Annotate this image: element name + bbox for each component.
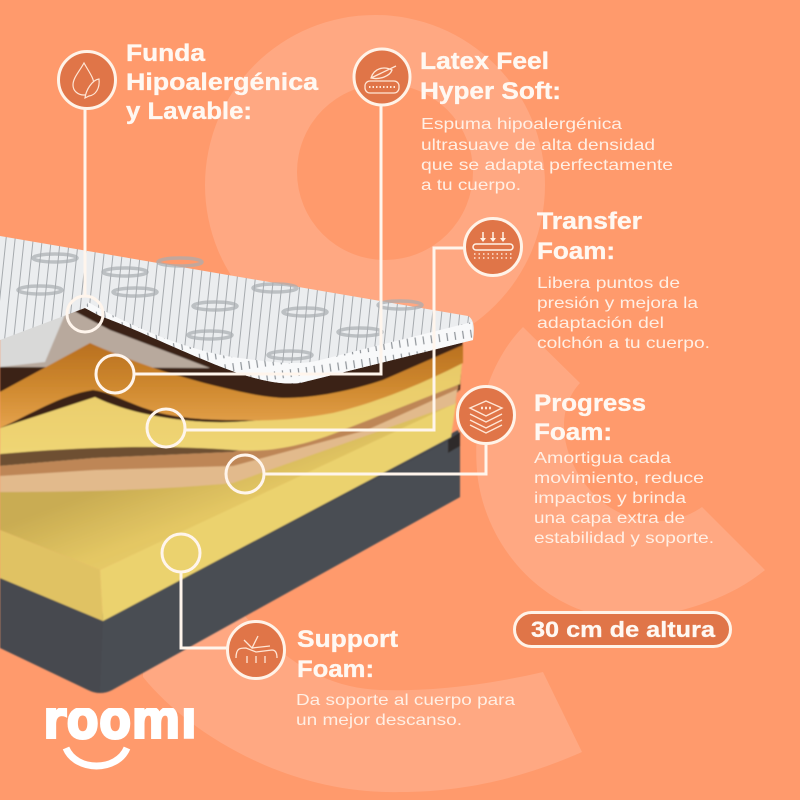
text: transfer foam (537, 208, 710, 352)
text: latex feel: Hyper Soft: (420, 78, 561, 105)
connector: progress foam (226, 444, 486, 493)
text: progress foam: movimiento, reduce (534, 470, 704, 487)
text: transfer foam: Libera puntos de (537, 275, 680, 292)
connector: funda (67, 108, 103, 332)
brown shadow band (0, 378, 460, 472)
text: progress foam: impactos y brinda (534, 490, 686, 507)
text: support foam: Da soporte al cuerpo para (296, 692, 515, 709)
text: transfer foam: presión y mejora la (537, 295, 698, 312)
mattress (0, 236, 474, 693)
transfer foam layer (0, 363, 462, 454)
latex layer (0, 343, 463, 428)
text: latex feel: que se adapta perfectamente (421, 157, 673, 174)
text: progress foam: Progress (534, 390, 646, 417)
icon: latex pillow and feather (354, 49, 410, 105)
text: transfer foam: adaptación del (537, 315, 664, 332)
text: funda hipoalergénica: Funda (126, 40, 206, 67)
gray base layer (0, 430, 460, 693)
dark backing between layers (0, 305, 463, 472)
text: support foam: un mejor descanso. (296, 712, 462, 729)
text: latex feel: ultrasuave de alta densidad (421, 137, 655, 154)
cover underside (0, 310, 210, 368)
text: transfer foam: Transfer (537, 208, 642, 235)
text: support foam (296, 626, 515, 729)
text: latex feel (420, 48, 673, 194)
text: progress foam: Amortigua cada (534, 450, 671, 467)
text: latex feel: a tu cuerpo. (421, 177, 521, 194)
foam stack (0, 305, 463, 693)
cover fabric (0, 236, 474, 384)
background ampersand shapes (143, 15, 765, 792)
text: progress foam: Foam: (534, 419, 612, 446)
text: progress foam: una capa extra de (534, 510, 685, 527)
icon: support body on foam (228, 622, 284, 678)
icon: progress foam stacked layers (458, 386, 514, 444)
text: transfer foam: colchón a tu cuerpo. (537, 335, 710, 352)
connector: latex feel (96, 105, 381, 393)
text: progress foam (534, 390, 714, 547)
text: progress foam: estabilidad y soporte. (534, 530, 714, 547)
progress foam layer (0, 385, 458, 492)
logo: roomi: roomi (43, 688, 197, 751)
text: funda hipoalergénica (126, 40, 319, 125)
text: support foam: Foam: (297, 656, 374, 683)
text: latex feel: Latex Feel (420, 48, 549, 75)
connector lines and markers (67, 105, 486, 648)
badge: 30 cm de altura (514, 612, 730, 646)
icon: water drop and feather (58, 52, 116, 108)
icon: transfer foam arrows (464, 218, 522, 276)
text: support foam: Support (297, 626, 398, 653)
connector: transfer foam (147, 248, 464, 447)
text: latex feel: Espuma hipoalergénica (421, 116, 622, 133)
text: funda hipoalergénica: Hipoalergénica (126, 69, 319, 96)
badge: 30 cm de altura: 30 cm de altura (531, 617, 716, 642)
logo: roomi (46, 708, 194, 770)
text: transfer foam: Foam: (537, 238, 615, 265)
support foam layer (0, 400, 456, 621)
text: funda hipoalergénica: y Lavable: (126, 98, 252, 125)
connector: support foam (162, 534, 227, 648)
